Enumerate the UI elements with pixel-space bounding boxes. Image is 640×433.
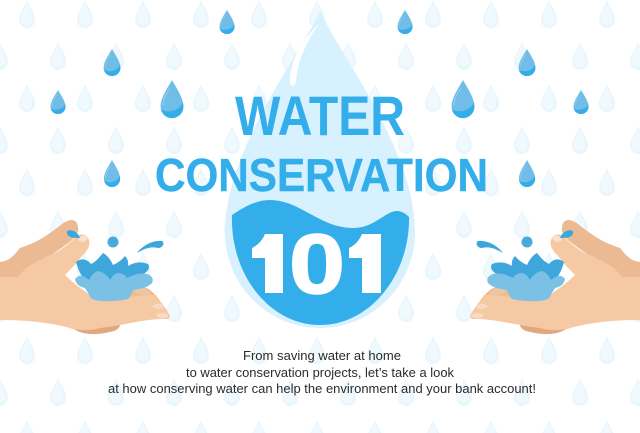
drop highlight [290,24,319,86]
intro text: From saving water at home [243,349,401,363]
large water drop [225,11,415,328]
title: WATER: WATER [235,84,405,147]
intro text: to water conservation projects, let’s take a look [186,366,455,380]
title: 101 [252,233,381,295]
intro text: at how conserving water can help the environment and your bank account! [108,382,536,396]
left hand with water splash [0,220,170,334]
falling blue drops [50,10,589,187]
title: CONSERVATION: CONSERVATION [155,149,488,201]
right hand with water splash [470,220,640,334]
water fill [232,200,409,325]
title: 101: 1 [347,217,388,311]
intro text [108,349,536,396]
title: 101: 1 [250,217,291,311]
title: 101: 0 [289,217,345,311]
